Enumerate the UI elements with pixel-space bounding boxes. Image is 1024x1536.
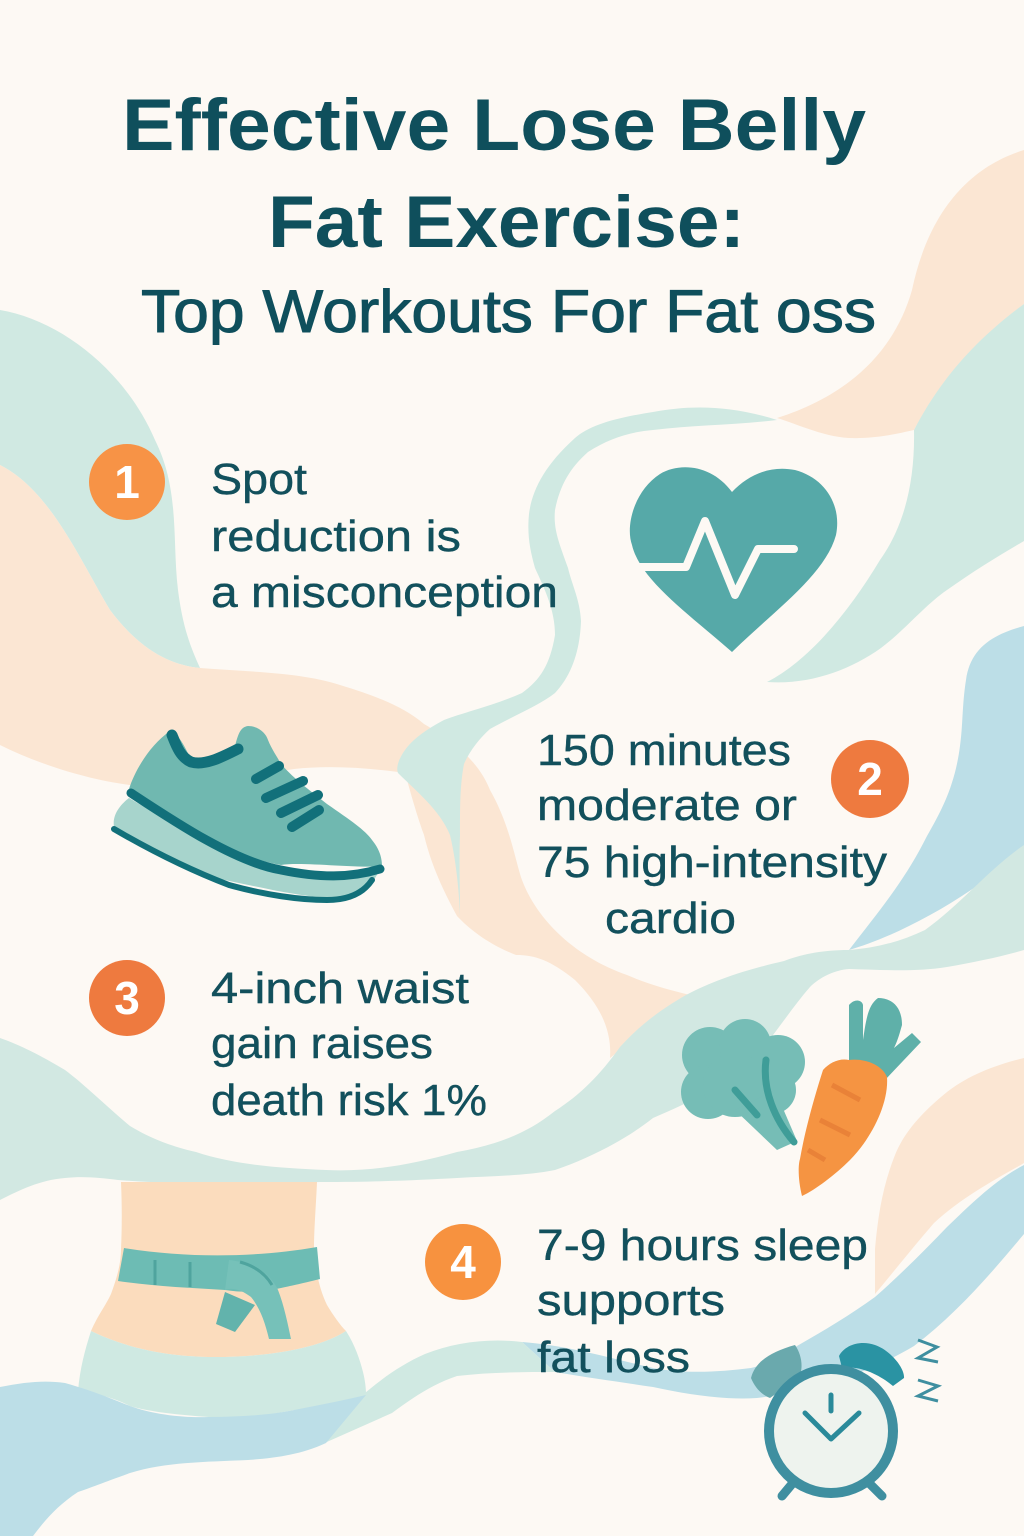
title <box>122 85 876 345</box>
illustration: waist with measuring tape <box>0 1182 366 1536</box>
item 2: cardio minutes <box>537 726 909 943</box>
item 2: cardio minutes: moderate or <box>537 781 797 830</box>
item 2: cardio minutes: 150 minutes <box>537 726 791 775</box>
item 1: spot reduction <box>89 444 558 617</box>
item 2: cardio minutes: 75 high-intensity <box>537 838 887 887</box>
item 4: sleep: 7-9 hours sleep <box>537 1221 868 1270</box>
measuring tape <box>118 1247 320 1339</box>
icon: running shoe <box>114 726 382 900</box>
title: Fat Exercise: <box>268 182 745 263</box>
item 3: waist gain: death risk 1% <box>211 1076 487 1125</box>
item 4: sleep: fat loss <box>537 1333 690 1382</box>
item 1: spot reduction: a misconception <box>211 568 558 617</box>
item 1: spot reduction: 1 <box>114 456 140 508</box>
item 2: cardio minutes: cardio <box>605 894 736 943</box>
icon: alarm clock <box>751 1340 938 1496</box>
item 3: waist gain: 3 <box>114 972 140 1024</box>
item 4: sleep: supports <box>537 1276 725 1325</box>
icon: broccoli <box>681 1019 805 1150</box>
icon: heart with pulse line <box>630 467 837 652</box>
item 2: cardio minutes: 2 <box>857 753 883 805</box>
item 3: waist gain <box>89 960 487 1125</box>
item 3: waist gain: 4-inch waist <box>211 964 469 1013</box>
item 3: waist gain: gain raises <box>211 1019 433 1068</box>
item 1: spot reduction: reduction is <box>211 512 461 561</box>
icon: carrot <box>799 998 921 1196</box>
title: Top Workouts For Fat oss <box>141 278 876 345</box>
item 4: sleep: 4 <box>450 1236 476 1288</box>
item 4: sleep <box>425 1221 868 1382</box>
item 1: spot reduction: Spot <box>211 455 307 504</box>
title: Effective Lose Belly <box>122 85 866 166</box>
